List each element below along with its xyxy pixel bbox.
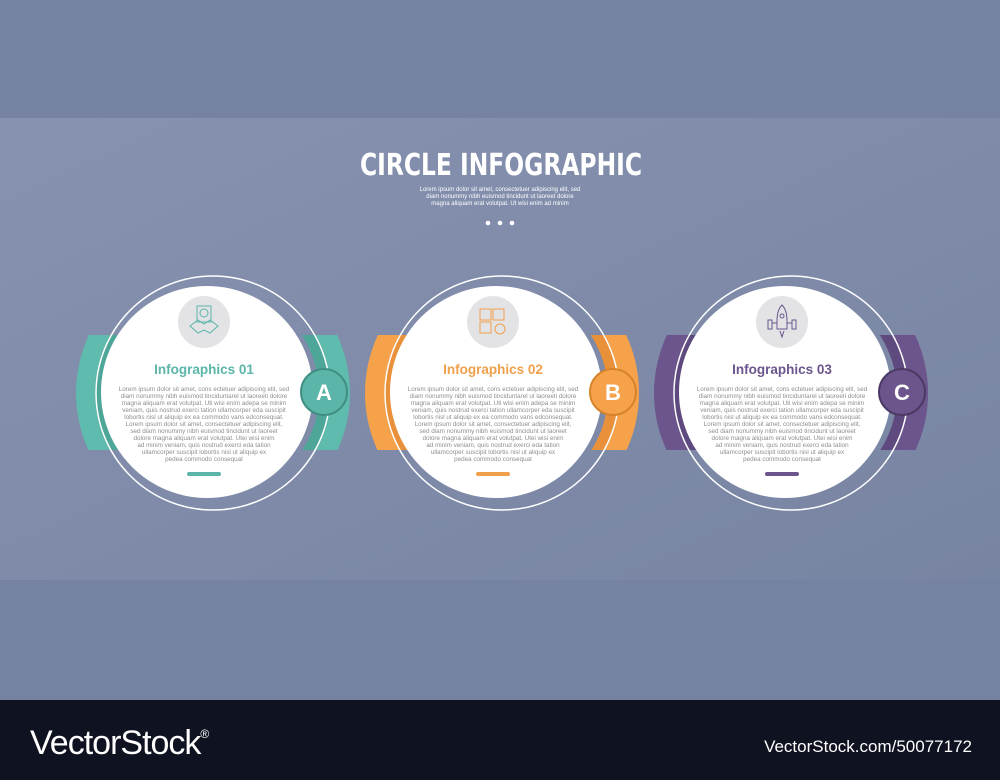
text block bbox=[697, 386, 868, 463]
heading: Infographics 03 bbox=[732, 362, 832, 377]
text block: diam nonummy nibh euismod tinciduntarel ut laoreeti dolore bbox=[410, 393, 577, 400]
text block bbox=[119, 386, 290, 463]
panel: background bbox=[0, 118, 1000, 580]
text block: diam nonummy nibh euismod tinciduntarel ut laoreeti dolore bbox=[699, 393, 866, 400]
subtitle: diam nonummy nibh euismod tincidunt ut laoreet dolore bbox=[426, 194, 574, 200]
badge B: B bbox=[605, 380, 621, 405]
footer: VectorStock.com/50077172 bbox=[764, 737, 972, 756]
icon: rocket bbox=[756, 296, 808, 348]
footer: VectorStock bbox=[30, 724, 200, 762]
text block: magna aliquam erat volutpat. Uti wisi enim adepa se minim bbox=[411, 400, 575, 407]
text block: lobortis nisl ut aliquip ex ea commodo vans edconsequat. bbox=[702, 414, 862, 421]
text block: ad minim veniam, quis nostrud exerci eda tation bbox=[137, 442, 271, 449]
text block: Lorem ipsum dolor sit amet, consectetuer adipiscing elit, bbox=[415, 421, 572, 428]
text block: ad minim veniam, quis nostrud exerci eda tation bbox=[715, 442, 849, 449]
text block: Lorem ipsum dolor sit amet, consectetuer adipiscing elit, bbox=[704, 421, 861, 428]
text block: magna aliquam erat volutpat. Uti wisi enim adepa se minim bbox=[122, 400, 286, 407]
text block: ullamcorper suscipit lobortis nisl ut aliquip ex bbox=[720, 449, 845, 456]
text block: dolore magna aliquam erat volutpat. Utei wisi enim bbox=[133, 435, 275, 442]
heading: Infographics 02 bbox=[443, 362, 543, 377]
heading: Infographics 01 bbox=[154, 362, 254, 377]
text block: lobortis nisl ut aliquip ex ea commodo vans edconsequat. bbox=[124, 414, 284, 421]
subtitle bbox=[420, 187, 580, 207]
badge A bbox=[301, 369, 347, 415]
text block: sed diam nonummy nibh euismod tincidunt ut laoreet bbox=[708, 428, 856, 435]
text block: ullamcorper suscipit lobortis nisl ut aliquip ex bbox=[142, 449, 267, 456]
badge C bbox=[879, 369, 925, 415]
text block: veniam, quis nostrud exerci tation ullamcorper eda suscipit bbox=[411, 407, 575, 414]
text block: dolore magna aliquam erat volutpat. Utei wisi enim bbox=[711, 435, 853, 442]
footer bbox=[0, 700, 1000, 780]
text block: sed diam nonummy nibh euismod tincidunt ut laoreet bbox=[419, 428, 567, 435]
subtitle: magna aliquam erat volutpat. Ut wisi enim ad minim bbox=[431, 201, 569, 207]
text block: veniam, quis nostrud exerci tation ullamcorper eda suscipit bbox=[700, 407, 864, 414]
text block: Lorem ipsum dolor sit amet, cons ectetuer adipiscing elit, sed bbox=[697, 386, 868, 393]
footer: ® bbox=[200, 727, 209, 741]
text block: ad minim veniam, quis nostrud exerci eda tation bbox=[426, 442, 560, 449]
badge C: C bbox=[894, 380, 910, 405]
text block: veniam, quis nostrud exerci tation ullamcorper eda suscipit bbox=[122, 407, 286, 414]
text block: sed diam nonummy nibh euismod tincidunt ut laoreet bbox=[130, 428, 278, 435]
panel: infographics 03 bbox=[664, 266, 925, 520]
text block: pedea commodo consequat bbox=[743, 456, 821, 463]
title: CIRCLE INFOGRAPHIC bbox=[360, 148, 642, 183]
badge B bbox=[590, 369, 636, 415]
badge A: A bbox=[316, 380, 332, 405]
text block: diam nonummy nibh euismod tinciduntarel ut laoreeti dolore bbox=[121, 393, 288, 400]
text block: Lorem ipsum dolor sit amet, cons ectetuer adipiscing elit, sed bbox=[408, 386, 579, 393]
dots bbox=[486, 221, 514, 225]
subtitle: Lorem ipsum dolor sit amet, consectetuer adipiscing elit, sed bbox=[420, 187, 580, 193]
icon: handshake bbox=[178, 296, 230, 348]
text block: pedea commodo consequat bbox=[454, 456, 532, 463]
text block: lobortis nisl ut aliquip ex ea commodo vans edconsequat. bbox=[413, 414, 573, 421]
text block: pedea commodo consequat bbox=[165, 456, 243, 463]
text block: dolore magna aliquam erat volutpat. Utei wisi enim bbox=[422, 435, 564, 442]
text block: magna aliquam erat volutpat. Uti wisi enim adepa se minim bbox=[700, 400, 864, 407]
panel: infographics 02 bbox=[375, 266, 636, 520]
icon: puzzle bbox=[467, 296, 519, 348]
text block: Lorem ipsum dolor sit amet, cons ectetuer adipiscing elit, sed bbox=[119, 386, 290, 393]
text block bbox=[408, 386, 579, 463]
text block: ullamcorper suscipit lobortis nisl ut aliquip ex bbox=[431, 449, 556, 456]
text block: Lorem ipsum dolor sit amet, consectetuer adipiscing elit, bbox=[126, 421, 283, 428]
panel: infographics 01 bbox=[86, 266, 347, 520]
